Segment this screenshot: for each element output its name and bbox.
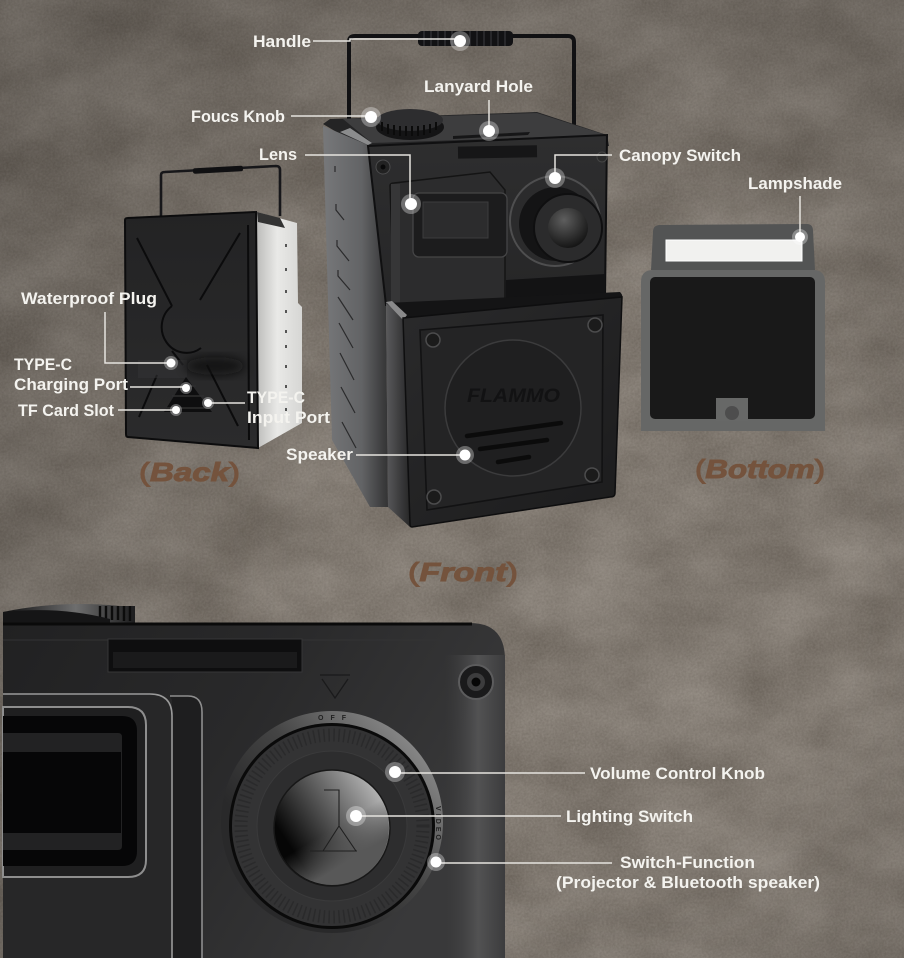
callout: waterproof plug: [21, 290, 178, 370]
lighting switch dome: [274, 770, 390, 886]
dial markings: OFF: [318, 715, 347, 722]
callout: canopy switch: [545, 147, 741, 188]
close-up dial: [221, 711, 443, 933]
callout: focus knob: Foucs Knob: [191, 108, 285, 126]
back port cover: [164, 377, 212, 412]
callout: volume control knob: [385, 762, 765, 783]
callout: canopy switch: Canopy Switch: [619, 147, 741, 165]
callout: speaker: [286, 446, 474, 464]
close-up panel: [3, 604, 505, 958]
front top face: [323, 112, 609, 150]
close-up screw: [459, 665, 493, 699]
callout: waterproof plug: Waterproof Plug: [21, 290, 157, 308]
device: back view: [125, 166, 302, 448]
callout: lanyard hole: [424, 78, 533, 141]
callout: lighting switch: [346, 806, 693, 826]
callout: lanyard hole: Lanyard Hole: [424, 78, 533, 96]
front handle: [349, 31, 574, 126]
pointer triangle: [320, 675, 350, 698]
focus knob: [376, 109, 444, 140]
back embossed X pattern: [137, 225, 249, 440]
top vent slot: [458, 145, 537, 159]
bottom base: [641, 270, 825, 431]
callout: type-c charging port: [14, 356, 192, 394]
back handle: [161, 166, 280, 216]
back side slots: [285, 244, 287, 411]
front rotary knob: [510, 176, 602, 266]
callout: type-c charging port: Charging Port: [14, 376, 129, 394]
callout: tf card slot: [18, 402, 182, 420]
device: front view: [323, 31, 622, 527]
front side vents: [335, 166, 356, 448]
callout: handle: Handle: [253, 33, 311, 51]
callout: lens: Lens: [259, 146, 297, 164]
front upper face: [368, 135, 607, 305]
callout: type-c input port: Input Port: [247, 409, 331, 427]
callout: lighting switch: Lighting Switch: [566, 808, 693, 826]
callout: switch-function: [427, 853, 820, 892]
heading: front: (Front ): [408, 557, 518, 587]
front side panel: [323, 126, 388, 507]
close-up vent slot: [108, 639, 302, 672]
front lower panel: [386, 292, 622, 527]
dial markings: VIDEO: [434, 806, 441, 841]
callout: type-c input port: [202, 389, 331, 427]
callout: lampshade: Lampshade: [748, 175, 842, 193]
back white side panel: [257, 212, 302, 448]
lens module: [390, 172, 507, 308]
callout: type-c charging port: TYPE-C: [14, 356, 72, 374]
volume wheel: [229, 723, 435, 929]
front corner screws: [376, 152, 607, 174]
heading: back: (Back ): [139, 457, 240, 487]
dial outer ring: [221, 711, 443, 933]
callout: volume control knob: Volume Control Knob: [590, 765, 765, 783]
heading: bottom: (Bottom ): [695, 454, 825, 484]
callout: type-c input port: TYPE-C: [247, 389, 305, 407]
dial markings: [318, 715, 441, 841]
callout: lens: [259, 146, 421, 214]
callout: switch-function: (Projector & Bluetooth speaker): [556, 874, 820, 892]
close-up lens module: [3, 694, 202, 958]
callout: switch-function: Switch-Function: [620, 854, 755, 872]
device: bottom view: [641, 224, 825, 431]
back black face: [125, 212, 258, 448]
lower panel left strip: [386, 302, 410, 527]
callout: focus knob: [191, 107, 381, 127]
callout: lampshade: [748, 175, 842, 245]
callout: handle: [253, 31, 470, 51]
callout: tf card slot: TF Card Slot: [18, 402, 114, 420]
lampshade: [651, 224, 815, 270]
lanyard hole: [453, 132, 530, 139]
top dial stub: [3, 604, 135, 623]
close-up body: [3, 623, 505, 958]
embossed logo: FLAMMO: [467, 386, 560, 407]
callout: speaker: Speaker: [286, 446, 354, 464]
bottom tab: [716, 398, 748, 421]
